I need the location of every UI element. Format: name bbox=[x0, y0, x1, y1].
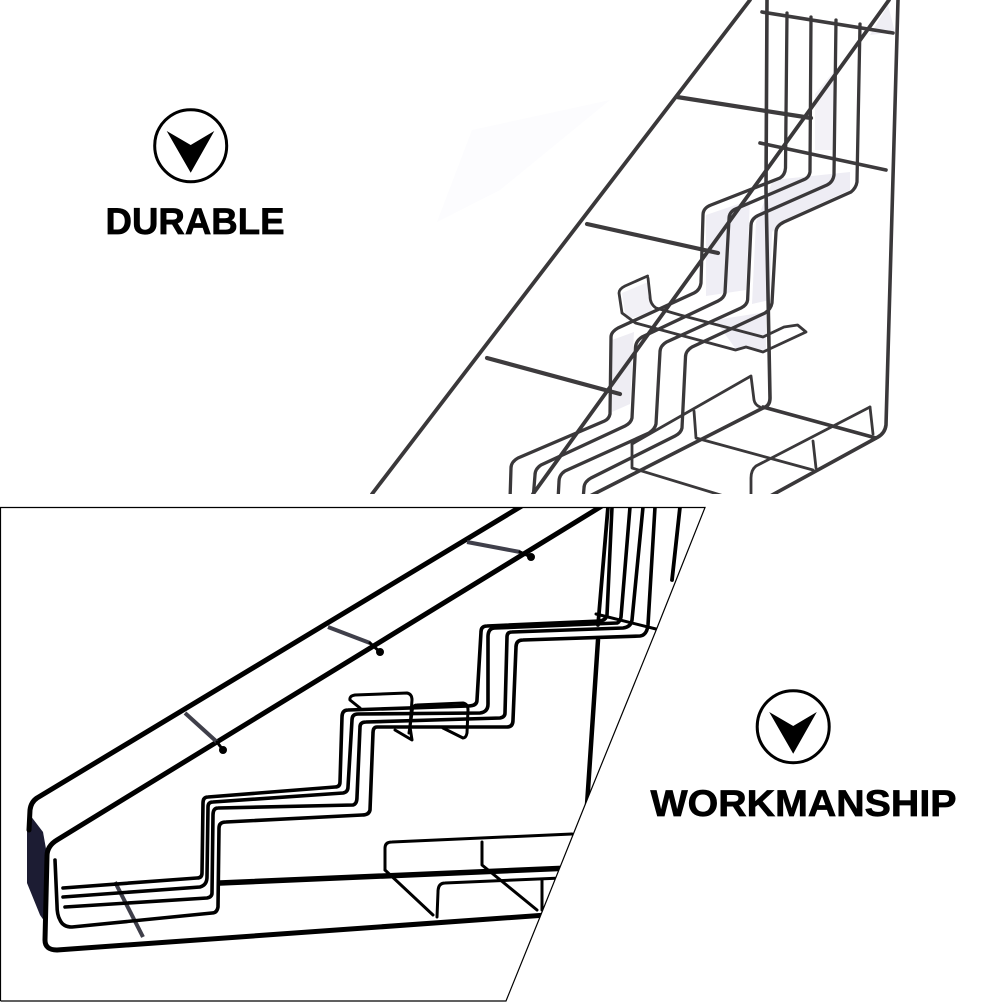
panel border bbox=[0, 508, 705, 1001]
lower racks bbox=[632, 376, 873, 500]
icon: durable check badge bbox=[155, 110, 227, 182]
rungs bbox=[487, 12, 893, 394]
lower racks bbox=[385, 834, 572, 917]
wire rack side view bbox=[27, 501, 680, 950]
rungs bbox=[115, 542, 520, 937]
back posts bbox=[590, 0, 898, 500]
dark end plate bbox=[27, 818, 46, 920]
panel: durable product photo bbox=[372, 0, 898, 500]
stepped wires bbox=[55, 507, 655, 927]
back posts and cross bar bbox=[587, 507, 680, 805]
stepped wires bbox=[510, 13, 860, 500]
panel: workmanship product photo bbox=[0, 501, 705, 1001]
icon: workmanship check badge bbox=[757, 691, 829, 763]
heading: durable: DURABLE bbox=[106, 201, 284, 242]
long front rails bbox=[372, 0, 889, 494]
rung end caps bbox=[217, 552, 534, 752]
heading: workmanship: WORKMANSHIP bbox=[650, 783, 956, 824]
upper shelf bracket bbox=[619, 276, 806, 352]
shelf brackets bbox=[350, 693, 468, 740]
top rails and base frame bbox=[29, 501, 610, 950]
